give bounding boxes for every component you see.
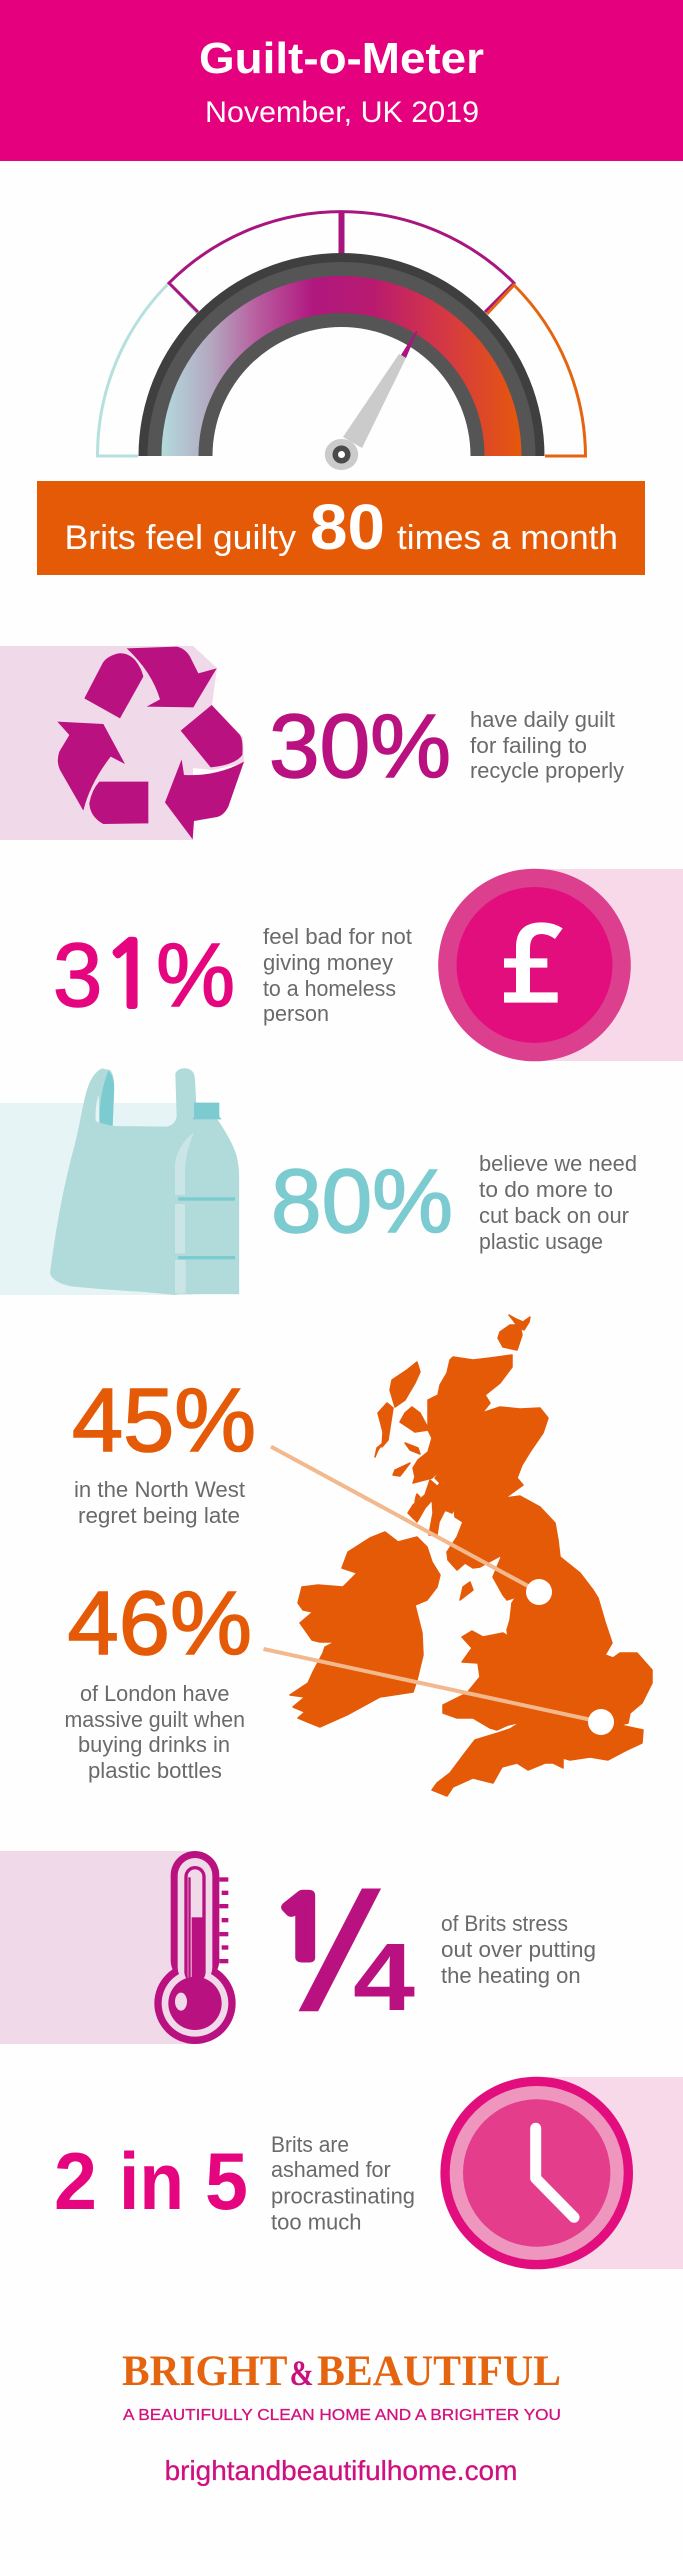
stat one quarter: 1 [273,1887,333,1971]
plastic caption: to do more to [479,1177,613,1202]
logo wordmark: BRIGHT [122,2348,288,2395]
recycling caption: have daily guilt [470,707,615,732]
panel: recycling [0,646,624,840]
gauge [97,212,585,470]
heating caption: out over putting [441,1937,596,1962]
logo wordmark: & [290,2353,314,2393]
London caption: buying drinks in [78,1732,230,1757]
stat 2 in 5 [54,2137,248,2227]
homeless caption: feel bad for not [263,924,412,949]
icon: clock [440,2077,633,2269]
gauge outer scale [97,212,585,456]
logo wordmark [122,2348,561,2395]
procrastination band [537,2077,683,2269]
homeless caption: person [263,1001,329,1026]
homeless band [534,869,683,1061]
North West caption: in the North West [74,1477,245,1502]
gauge rings [138,253,544,456]
title: Guilt-o-Meter [199,34,484,83]
stat 2 in 5: 2 [54,2137,97,2227]
stat 80%: 80% [271,1152,453,1252]
icon: recycle [57,647,244,839]
plastic caption [479,1151,637,1254]
plastic band [0,1103,193,1295]
procrastination caption: procrastinating [271,2184,415,2209]
orange banner: times a month [397,519,618,557]
plastic caption: plastic usage [479,1229,603,1254]
icon: pound coin [438,869,631,1061]
plastic caption: cut back on our [479,1203,629,1228]
stat 2 in 5: 5 [205,2137,248,2227]
callout line: London [264,1649,601,1722]
plastic caption: believe we need [479,1151,637,1176]
icon: plastic bag and bottle [50,1068,239,1295]
marker: North West [526,1579,552,1605]
procrastination caption: too much [271,2210,362,2235]
procrastination caption [271,2132,415,2235]
heating caption: the heating on [441,1963,581,1988]
heating band [0,1851,195,2044]
logo wordmark: BEAUTIFUL [317,2348,561,2395]
website: brightandbeautifulhome.com [165,2455,517,2486]
panel: procrastination [54,2077,683,2269]
London caption: massive guilt when [64,1707,245,1732]
recycling caption [470,707,624,783]
marker: London [588,1709,614,1735]
homeless caption: to a homeless [263,976,396,1001]
stat one quarter: / [287,1859,392,2043]
callout line: North West [271,1447,539,1592]
subtitle: November, UK 2019 [205,96,479,129]
stat 2 in 5: in [119,2137,184,2227]
London caption: of London have [80,1681,230,1706]
stat 46%: 46% [68,1574,252,1674]
panel: homeless [53,869,683,1061]
gauge needle [325,331,418,470]
heating caption: of Brits stress [441,1911,568,1936]
orange banner [37,481,645,575]
stat 30%: 30% [269,697,451,797]
tagline: A BEAUTIFULLY CLEAN HOME AND A BRIGHTER YOU [123,2407,561,2424]
recycling caption: recycle properly [470,758,624,783]
orange banner: Brits feel guilty [64,519,296,557]
panel: heating [0,1851,596,2044]
stat 31%: 31% [53,926,235,1026]
London caption: plastic bottles [88,1758,222,1783]
orange banner: 80 [310,491,385,563]
procrastination caption: ashamed for [271,2157,391,2182]
panel: plastic [0,1068,637,1295]
header [0,0,683,161]
stat 45%: 45% [72,1371,256,1471]
icon: thermometer [154,1851,236,2044]
London caption [64,1681,245,1783]
panel: regional map [64,1315,652,1796]
heating caption [441,1911,596,1988]
North West caption [74,1477,245,1528]
stat one quarter: 4 [353,1924,415,2031]
North West caption: regret being late [78,1503,240,1528]
logo block [122,2348,561,2486]
map of UK and Ireland [290,1315,652,1796]
procrastination caption: Brits are [271,2132,349,2157]
homeless caption: giving money [263,950,393,975]
homeless caption [263,924,412,1026]
recycling caption: for failing to [470,733,587,758]
recycling band [0,646,244,840]
